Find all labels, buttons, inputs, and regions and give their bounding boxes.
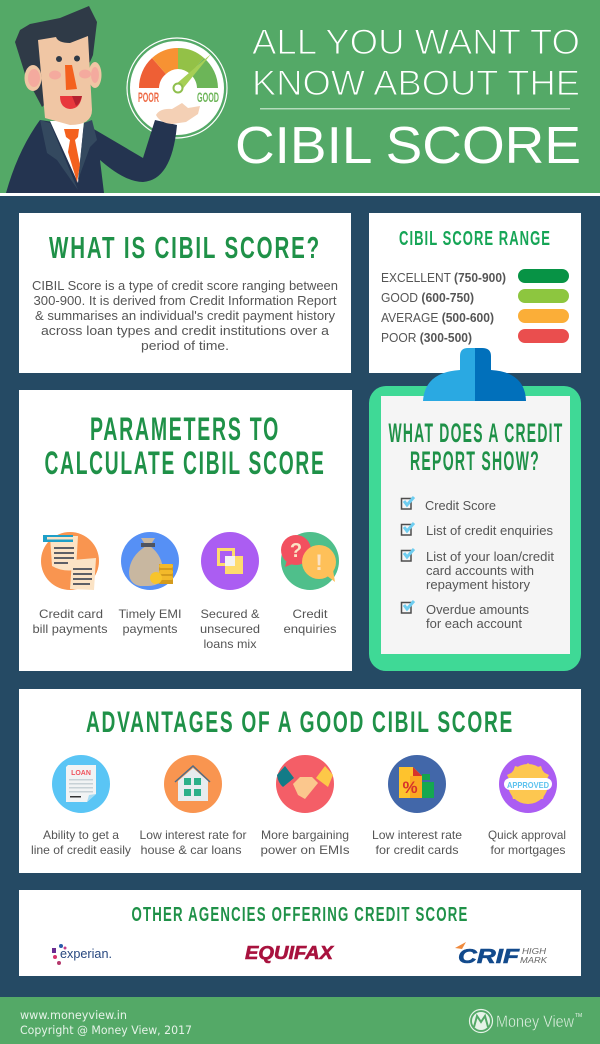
captions: advantages: for credit cards [376, 843, 458, 857]
icon: approved badge [499, 755, 557, 813]
icon: house [164, 755, 222, 813]
panel: advantages [19, 689, 581, 873]
captions: advantages: Ability to get a [43, 828, 119, 842]
footer [0, 997, 600, 1044]
item: overdue amounts: for each account [426, 617, 523, 631]
icon: clipboard clip [423, 348, 526, 401]
captions: parameters: Secured & [200, 607, 260, 621]
text block: definition: CIBIL Score is a type of credit score ranging between [32, 279, 338, 293]
heading: parameters: PARAMETERS TO [90, 411, 280, 447]
text block: definition: period of time. [141, 339, 229, 353]
icon: handshake [276, 755, 334, 813]
heading: what does a credit report show [388, 418, 564, 476]
heading: parameters: CALCULATE CIBIL SCORE [44, 445, 326, 481]
icon: loan document: LOAN [71, 770, 91, 777]
panel: parameters [19, 390, 352, 671]
captions: advantages: Low interest rate for [140, 828, 246, 842]
legend: excellent [381, 269, 569, 285]
captions: advantages: for mortgages [490, 843, 566, 857]
panel: clipboard credit report [369, 348, 581, 671]
text block: definition: across loan types and credit institutions over a [41, 324, 329, 338]
item: overdue amounts: Overdue amounts [426, 603, 529, 617]
captions: parameters: payments [122, 622, 178, 636]
legend: poor [381, 329, 569, 345]
item: loan accounts [402, 549, 555, 592]
item: credit score: Credit Score [425, 499, 496, 513]
captions: advantages [31, 828, 566, 857]
legend: average: AVERAGE (500-600) [381, 311, 494, 325]
illustration: businessman [6, 6, 200, 193]
illustration: gauge on a white dial: POOR [138, 89, 159, 105]
icon: approved badge: APPROVED [507, 780, 549, 790]
captions: parameters [32, 607, 336, 651]
logo: experian: experian. [60, 946, 112, 961]
icon: credit card bill [41, 532, 99, 590]
captions: parameters: Timely EMI [118, 607, 182, 621]
logo: Money View: Money View [496, 1013, 574, 1031]
footer text: www.moneyview.in [20, 1008, 127, 1022]
icon: enquiries speech bubbles: ? [290, 540, 302, 562]
checklist [402, 497, 555, 631]
title [235, 23, 581, 175]
captions: advantages: Quick approval [488, 828, 566, 842]
heading: parameters [44, 411, 326, 481]
icon: loan document [52, 755, 110, 813]
icon: percent bill and cash: % [402, 778, 418, 797]
logo: equifax: EQUIFAX [245, 943, 334, 963]
title: ALL YOU WANT TO [252, 23, 580, 62]
item: loan accounts: card accounts with [426, 564, 534, 578]
logo: CRIF High Mark: HIGH [522, 947, 546, 956]
text block: definition [32, 279, 338, 353]
logo: Money View [470, 1010, 582, 1032]
item: overdue amounts [402, 601, 529, 631]
captions: parameters: Credit [292, 607, 328, 621]
item: loan accounts: List of your loan/credit [426, 550, 555, 564]
text block: definition: & summarises an individual's credit payment history [35, 309, 336, 323]
panel: other agencies [19, 890, 581, 976]
title: KNOW ABOUT THE [252, 64, 580, 103]
logo: Money View: TM [575, 1013, 582, 1019]
captions: parameters: bill payments [32, 622, 108, 636]
logo: experian [52, 944, 112, 965]
captions: advantages: Low interest rate [372, 828, 462, 842]
footer text: Copyright @ Money View, 2017 [20, 1023, 192, 1037]
legend: average [381, 309, 569, 325]
captions: advantages: power on EMIs [260, 843, 350, 857]
logo: CRIF High Mark: MARK [520, 956, 548, 965]
header banner [0, 0, 600, 196]
item: loan accounts: repayment history [426, 578, 531, 592]
illustration: gauge on a white dial: GOOD [197, 89, 219, 105]
icon: enquiries speech bubbles [281, 532, 339, 590]
item: credit score [402, 497, 496, 513]
logo: CRIF High Mark: CRIF [458, 946, 520, 968]
logo: CRIF High Mark [455, 942, 548, 968]
captions: parameters: Credit card [39, 607, 103, 621]
legend: good: GOOD (600-750) [381, 291, 474, 305]
captions: advantages: house & car loans [140, 843, 242, 857]
captions: parameters: loans mix [204, 637, 256, 651]
footer text [20, 1008, 192, 1037]
legend: excellent: EXCELLENT (750-900) [381, 271, 506, 285]
icon: overlapping squares [201, 532, 259, 590]
captions: advantages: line of credit easily [31, 843, 131, 857]
text block: definition: 300-900. It is derived from Credit Information Report [34, 294, 337, 308]
captions: advantages: More bargaining [261, 828, 349, 842]
legend: poor: POOR (300-500) [381, 331, 472, 345]
panel: CIBIL score range [369, 213, 581, 373]
title: CIBIL SCORE [235, 117, 581, 175]
legend: good [381, 289, 569, 305]
captions: parameters: unsecured [200, 622, 260, 636]
icon: enquiries speech bubbles: ! [315, 550, 323, 575]
icon: percent bill and cash [388, 755, 446, 813]
heading: what is CIBIL score: WHAT IS CIBIL SCORE? [49, 230, 321, 265]
icon: money bag [121, 532, 179, 590]
illustration: gauge on a white dial [127, 38, 227, 138]
captions: parameters: enquiries [284, 622, 336, 636]
item: credit enquiries: List of credit enquiries [426, 524, 553, 538]
panel: what is CIBIL score [19, 213, 351, 373]
